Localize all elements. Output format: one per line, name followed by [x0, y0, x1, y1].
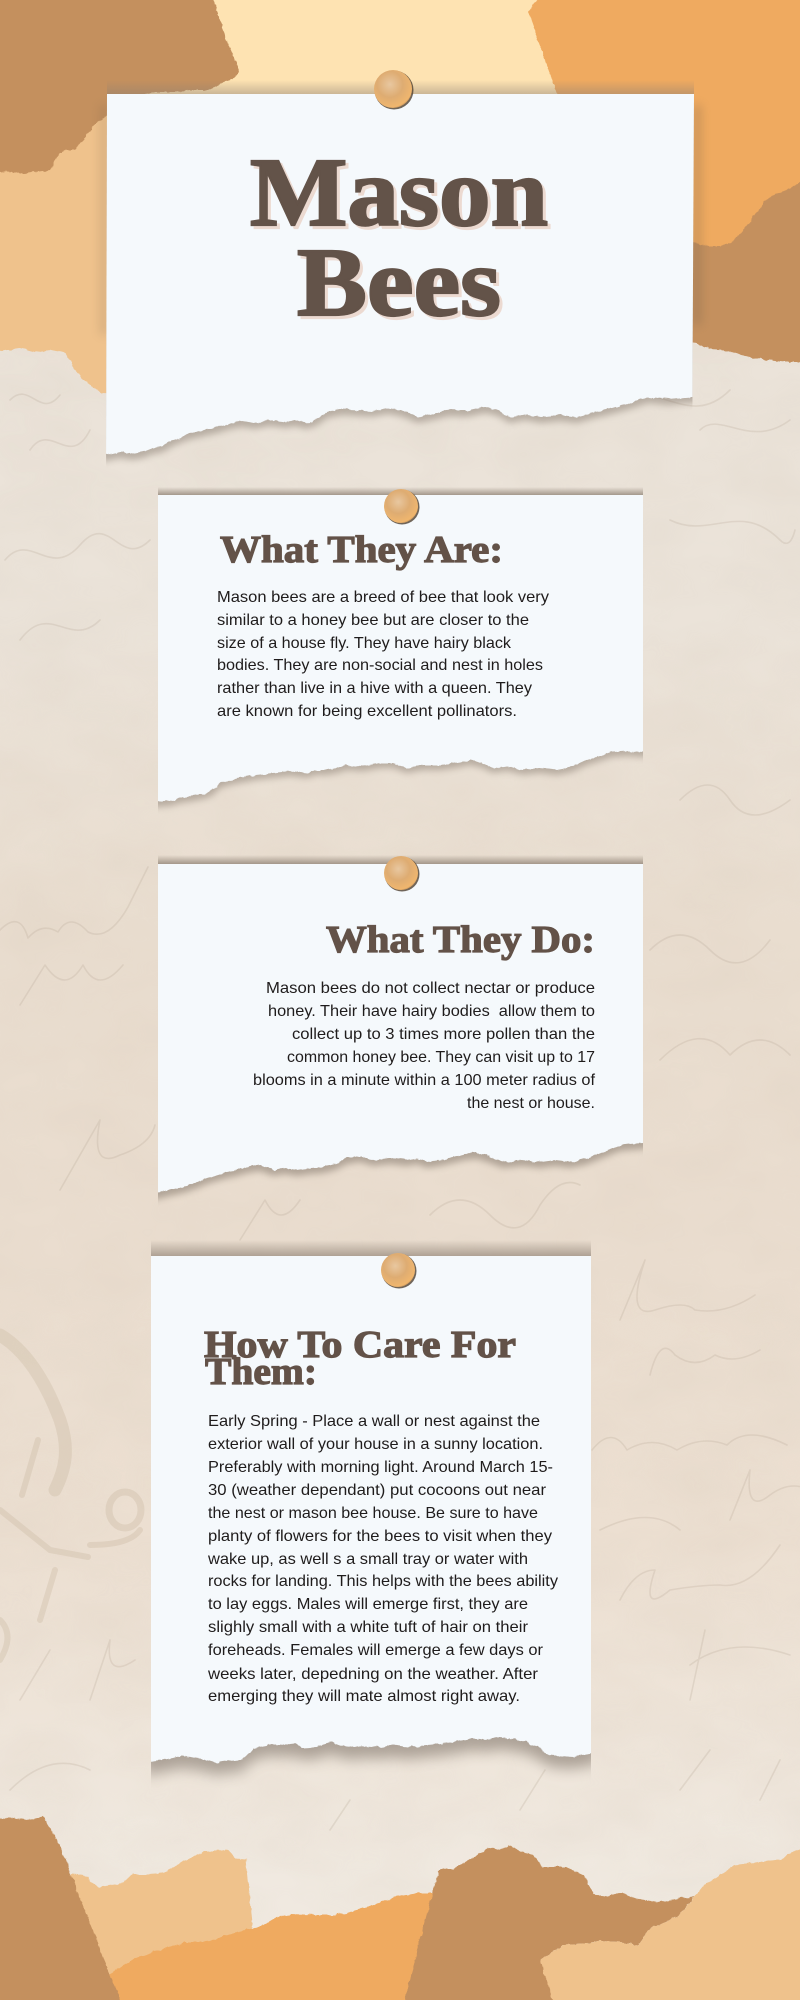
icon: brass pin — [374, 70, 414, 110]
card shadow — [158, 1142, 643, 1202]
faint ink flourish — [0, 1335, 141, 1660]
body text: emerging they will mate almost right away. — [208, 1688, 520, 1705]
body text: slighly small with a white tuft of hair on their — [208, 1619, 529, 1636]
body text: common honey bee. They can visit up to 17 — [287, 1049, 595, 1066]
torn paper — [150, 854, 651, 1195]
body text: similar to a honey bee but are closer to the — [217, 612, 529, 629]
panel: what they do — [150, 854, 651, 1201]
body text: the nest or mason bee house. Be sure to have — [208, 1505, 538, 1522]
torn paper — [143, 1245, 599, 1763]
body text: size of a house fly. They have hairy black — [217, 635, 512, 652]
body text: wake up, as well s a small tray or water with — [207, 1551, 528, 1568]
heading: Them: — [205, 1351, 317, 1393]
body text — [207, 1413, 558, 1705]
body text: rocks for landing. This helps with the bees ability — [208, 1573, 558, 1590]
panel: title card — [98, 70, 702, 462]
heading — [204, 1324, 516, 1393]
background: torn coloured paper, bottom — [0, 1817, 800, 2000]
icon: brass pin — [384, 856, 420, 892]
card shadow — [158, 750, 643, 810]
icon: brass pin — [384, 489, 420, 524]
card shadow — [151, 1737, 591, 1782]
panel: how to care for them — [143, 1240, 599, 1775]
body text — [217, 589, 549, 720]
body text: honey. Their have hairy bodies allow them to — [268, 1003, 595, 1020]
body text: are known for being excellent pollinators. — [217, 703, 517, 720]
body text: exterior wall of your house in a sunny location. — [208, 1436, 543, 1453]
background: torn coloured paper, top — [0, 0, 800, 430]
body text: collect up to 3 times more pollen than the — [292, 1026, 595, 1043]
body text: Mason bees do not collect nectar or produce — [266, 980, 595, 997]
body text: foreheads. Females will emerge a few days or — [208, 1642, 544, 1659]
card shadow — [98, 86, 702, 462]
body text: bodies. They are non-social and nest in holes — [217, 657, 543, 674]
panel: what they are — [150, 485, 651, 808]
faint handwriting strokes — [0, 390, 800, 1830]
body text: Mason bees are a breed of bee that look very — [217, 589, 549, 606]
title — [250, 139, 548, 337]
title: Mason — [250, 139, 548, 247]
body text: planty of flowers for the bees to visit when they — [208, 1528, 552, 1545]
body text: Early Spring - Place a wall or nest against the — [208, 1413, 540, 1430]
heading: What They Do: — [326, 919, 595, 961]
heading: How To Care For — [204, 1324, 516, 1366]
torn paper — [98, 80, 702, 456]
body text: Preferably with morning light. Around March 15- — [208, 1459, 553, 1476]
heading: What They Are: — [220, 529, 503, 571]
body text: weeks later, depedning on the weather. After — [207, 1666, 539, 1683]
torn paper — [150, 485, 651, 803]
body text: blooms in a minute within a 100 meter radius of — [253, 1072, 596, 1089]
body text: 30 (weather dependant) put cocoons out near — [208, 1482, 547, 1499]
title: Bees — [297, 229, 501, 337]
body text: the nest or house. — [467, 1095, 595, 1112]
icon: brass pin — [381, 1253, 416, 1288]
body text: to lay eggs. Males will emerge first, they are — [208, 1596, 528, 1613]
body text: rather than live in a hive with a queen. They — [217, 680, 532, 697]
body text — [253, 980, 596, 1112]
